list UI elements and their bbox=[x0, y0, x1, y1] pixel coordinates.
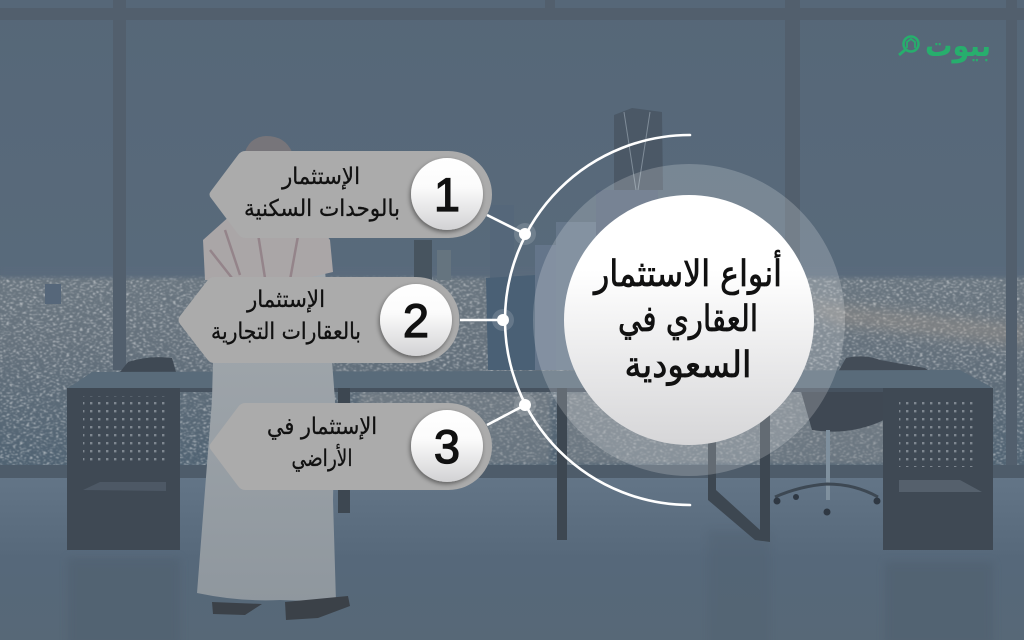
label 3: الإستثمار في bbox=[267, 414, 377, 440]
logo bbox=[899, 28, 991, 64]
label 1: بالوحدات السكنية bbox=[244, 196, 400, 222]
number badge 1 bbox=[411, 158, 483, 230]
label 2: الإستثمار bbox=[246, 287, 325, 313]
number badge 3: 3 bbox=[434, 420, 460, 473]
label 3: الأراضي bbox=[292, 444, 352, 472]
arc with connector lines bbox=[460, 135, 690, 505]
title: العقاري في bbox=[618, 299, 758, 340]
number badge 2: 2 bbox=[403, 294, 429, 347]
chair right bbox=[774, 356, 930, 516]
number badge 2 bbox=[380, 284, 452, 356]
central title circle bbox=[533, 164, 845, 476]
number badge 3 bbox=[411, 410, 483, 482]
left pedestal bbox=[67, 388, 180, 550]
logo wordmark: بيوت bbox=[925, 28, 991, 64]
connector 1 bbox=[487, 215, 536, 245]
man in thobe bbox=[197, 136, 350, 620]
title bbox=[592, 250, 782, 386]
number badge 1: 1 bbox=[434, 168, 460, 221]
chair left bbox=[120, 357, 176, 372]
item 2 bbox=[178, 277, 459, 363]
connector 2 bbox=[460, 309, 514, 331]
label 2 bbox=[211, 287, 361, 345]
desk bbox=[67, 370, 993, 550]
right pedestal bbox=[883, 388, 993, 550]
label 1 bbox=[244, 164, 400, 222]
icon: magnifier with house bbox=[899, 36, 918, 55]
label 1: الإستثمار bbox=[281, 164, 360, 190]
title: السعودية bbox=[624, 345, 752, 386]
item 3 bbox=[210, 403, 492, 490]
label 3 bbox=[267, 414, 377, 472]
window frame bbox=[0, 0, 1024, 470]
floor bbox=[0, 465, 1024, 640]
city skyline band bbox=[0, 268, 1024, 470]
item 1 bbox=[210, 151, 492, 238]
towers bbox=[414, 108, 663, 370]
label 2: بالعقارات التجارية bbox=[211, 319, 361, 345]
title: أنواع الاستثمار bbox=[592, 250, 782, 295]
connector 3 bbox=[487, 394, 536, 425]
